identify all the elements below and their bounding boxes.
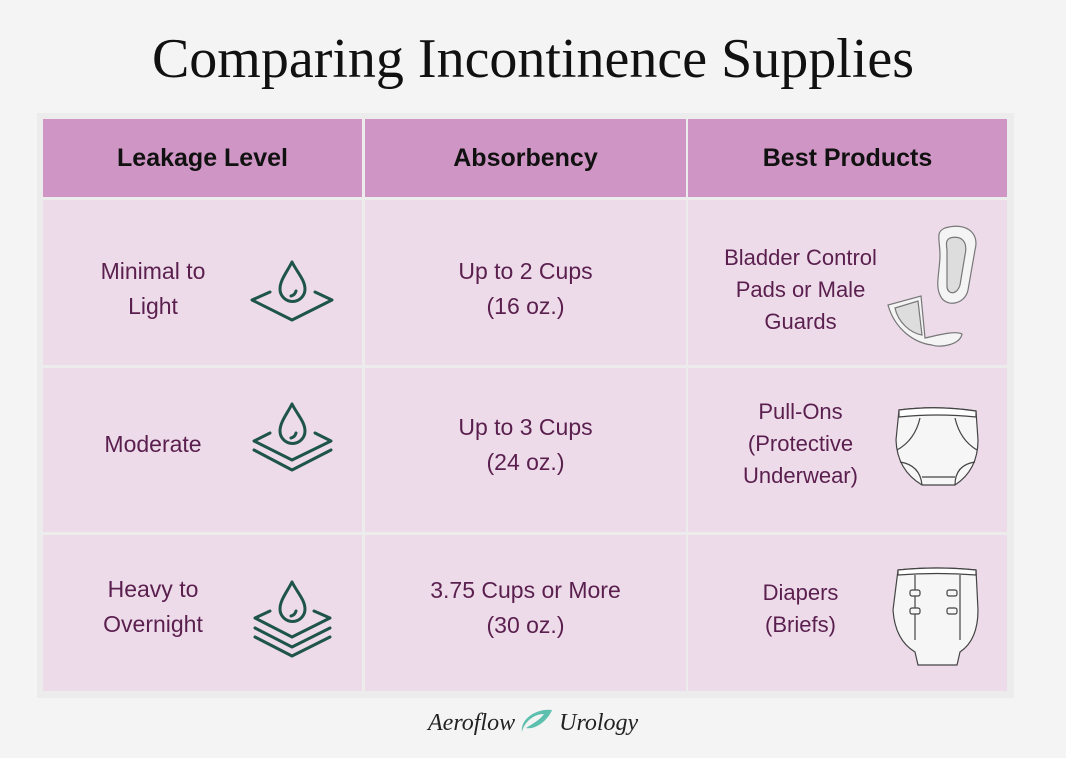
header: leakage level (43, 119, 362, 197)
row 2 leakage: Moderate (104, 431, 202, 457)
row 3 products (688, 535, 1007, 691)
row 2 products: Underwear) (743, 463, 858, 488)
header: absorbency: Absorbency (453, 144, 598, 172)
header: best products: Best Products (763, 144, 932, 172)
row 3 absorbency: (30 oz.) (486, 612, 564, 638)
header: best products (688, 119, 1007, 197)
row 2 absorbency: Up to 3 Cups (458, 414, 593, 440)
logo: Aeroflow Urology: Aeroflow Urology (428, 710, 638, 736)
icon: drop three layers (255, 582, 330, 656)
row 2 products: (Protective (748, 431, 853, 456)
row 1 products: Pads or Male (736, 277, 865, 302)
row 2 leakage (43, 368, 362, 532)
icon: pull-on underwear (896, 408, 978, 485)
row 3 leakage: Heavy to (108, 576, 198, 602)
row 3 leakage (43, 535, 362, 691)
table frame (37, 113, 1014, 698)
row 1 products (688, 200, 1007, 365)
row 2 products: Pull-Ons (758, 399, 843, 424)
row 2 products (688, 368, 1007, 532)
icon: drop one layer (252, 262, 332, 320)
row 1 products: Guards (764, 309, 837, 334)
icon: diaper brief (893, 568, 978, 665)
row 3 absorbency (365, 535, 686, 691)
row 3 absorbency: 3.75 Cups or More (430, 577, 621, 603)
row 3 leakage: Overnight (103, 611, 203, 637)
title: Comparing Incontinence Supplies (152, 28, 914, 90)
row 1 products: Bladder Control (724, 245, 877, 270)
row 2 absorbency: (24 oz.) (486, 449, 564, 475)
header: absorbency (365, 119, 686, 197)
row 1 absorbency: (16 oz.) (486, 292, 564, 318)
header: leakage level: Leakage Level (117, 144, 288, 172)
row 3 products: (Briefs) (765, 612, 836, 637)
row 1 absorbency (365, 200, 686, 365)
row 1 absorbency: Up to 2 Cups (458, 258, 593, 284)
row 1 leakage (43, 200, 362, 365)
icon: drop two layers (254, 404, 331, 470)
row 2 absorbency (365, 368, 686, 532)
icon: pads (888, 226, 976, 346)
row 1 leakage: Light (128, 293, 178, 319)
row 3 products: Diapers (763, 580, 838, 605)
row 1 leakage: Minimal to (101, 258, 205, 284)
